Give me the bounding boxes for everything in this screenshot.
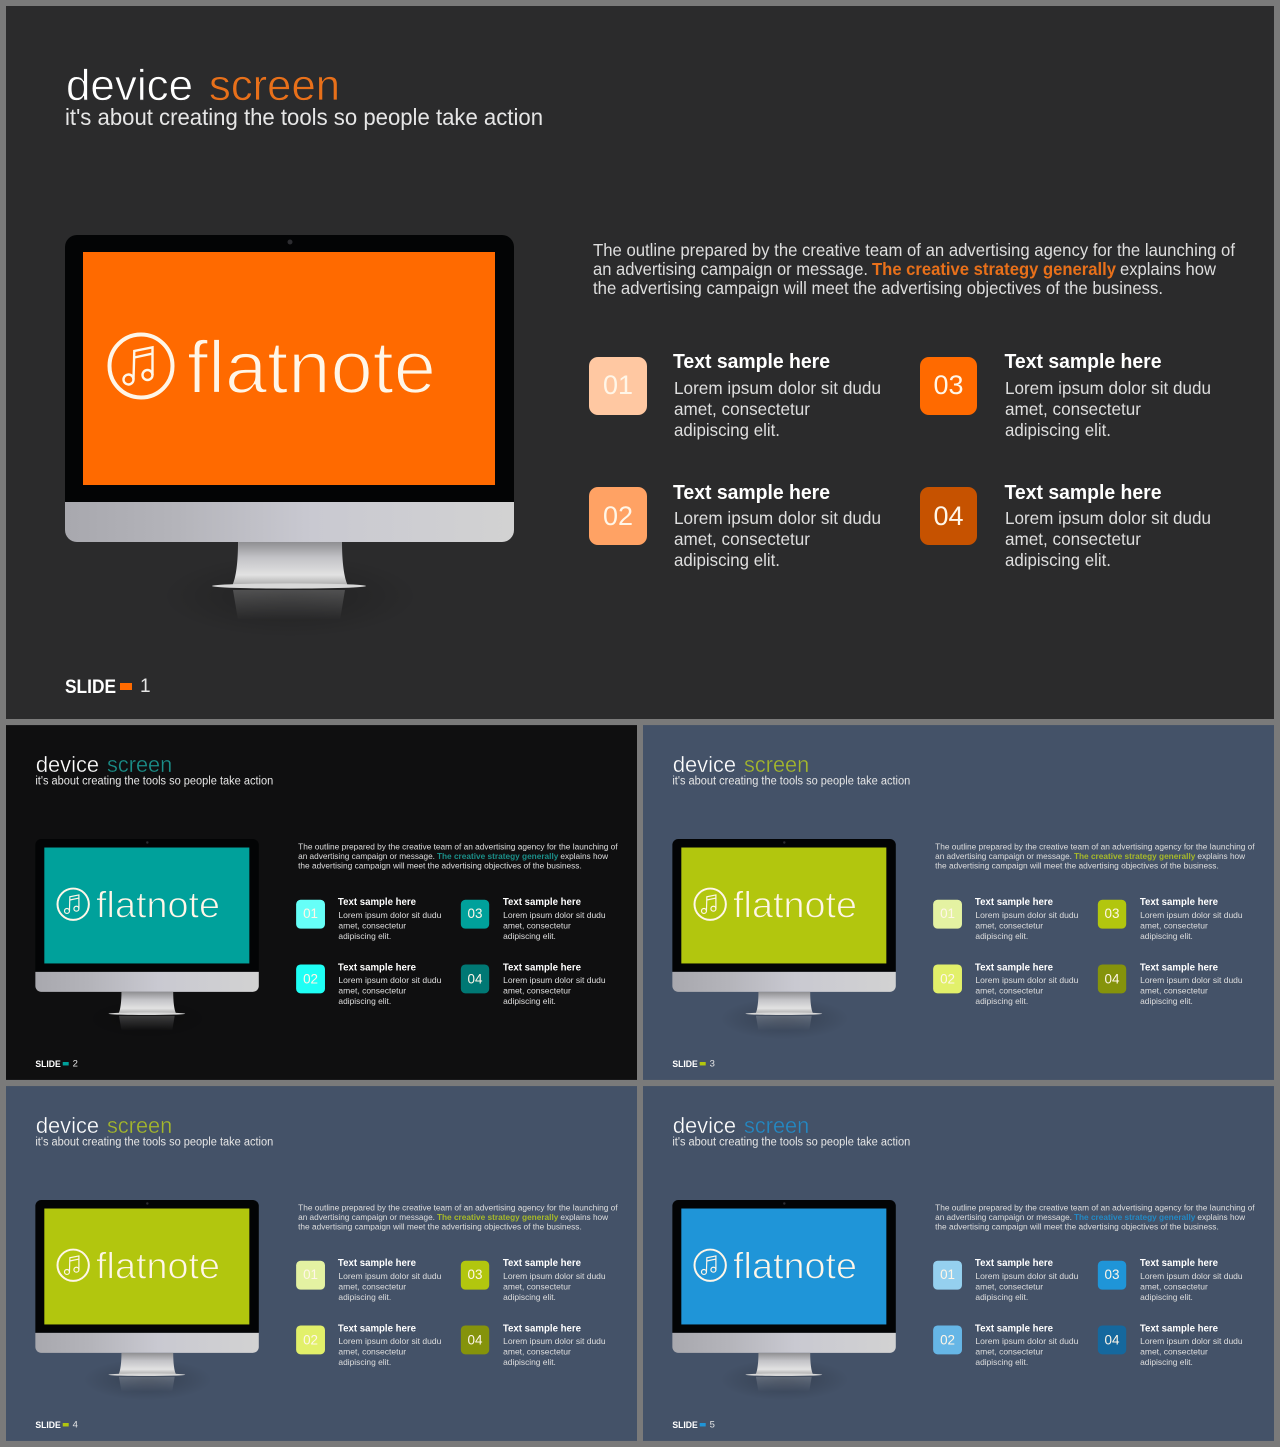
- item 01: Lorem ipsum dolor sit dudu: [338, 1271, 442, 1281]
- item 03: 03: [1105, 906, 1119, 921]
- item 02: adipiscing elit.: [338, 1357, 391, 1367]
- item 02: Text sample here: [975, 1323, 1053, 1334]
- item 04: adipiscing elit.: [1005, 550, 1111, 570]
- item 04: 04: [933, 501, 964, 531]
- item 04: 04: [1105, 1332, 1120, 1347]
- item 03: 03: [933, 370, 964, 400]
- item 01: adipiscing elit.: [338, 1292, 391, 1302]
- item 01: amet, consectetur: [674, 399, 810, 419]
- item 03: amet, consectetur: [503, 921, 571, 931]
- item 01: [933, 897, 1079, 941]
- item 04: 04: [468, 1332, 483, 1347]
- item 03: amet, consectetur: [1140, 921, 1208, 931]
- intro paragraph: the advertising campaign will meet the advertising objectives of the business.: [298, 860, 582, 870]
- title: device: [66, 61, 193, 110]
- item 04: amet, consectetur: [1140, 985, 1208, 995]
- intro paragraph: the advertising campaign will meet the advertising objectives of the business.: [593, 278, 1163, 298]
- title: [66, 61, 340, 110]
- item 04: adipiscing elit.: [1140, 1357, 1193, 1367]
- panel: slide 2 (teal, black background): [6, 725, 637, 1080]
- slide number: SLIDE: [35, 1420, 61, 1431]
- item 03: adipiscing elit.: [503, 931, 556, 941]
- slide number: [672, 1058, 715, 1070]
- intro paragraph: The outline prepared by the creative team of an advertising agency for the launching of: [593, 240, 1235, 260]
- slide number: [672, 1419, 715, 1431]
- item 01: 01: [303, 1267, 318, 1282]
- item 02: amet, consectetur: [674, 529, 810, 549]
- item 01: [589, 351, 881, 440]
- item 02: Lorem ipsum dolor sit dudu: [975, 1336, 1079, 1346]
- item 03: Lorem ipsum dolor sit dudu: [1140, 1271, 1243, 1281]
- item 02: Text sample here: [338, 1323, 416, 1334]
- item 01: adipiscing elit.: [338, 931, 391, 941]
- slide number: [35, 1058, 78, 1070]
- item 04: adipiscing elit.: [503, 1357, 556, 1367]
- intro paragraph: [298, 1203, 618, 1231]
- item 01: Lorem ipsum dolor sit dudu: [338, 910, 442, 920]
- item 04: [461, 962, 606, 1006]
- title: [673, 1113, 809, 1138]
- intro paragraph: The outline prepared by the creative team of an advertising agency for the launching of: [298, 842, 618, 852]
- intro paragraph: explains how: [1120, 259, 1216, 279]
- panel: slide 1 (orange, large): [6, 6, 1274, 719]
- item 01: Lorem ipsum dolor sit dudu: [975, 910, 1079, 920]
- slide number: 2: [73, 1058, 78, 1069]
- item 03: amet, consectetur: [1140, 1282, 1208, 1292]
- title: screen: [107, 752, 172, 777]
- intro paragraph: the advertising campaign will meet the advertising objectives of the business.: [935, 860, 1219, 870]
- title: device: [36, 752, 99, 777]
- logo: flatnote: flatnote: [96, 1246, 220, 1287]
- item 03: Lorem ipsum dolor sit dudu: [1005, 378, 1211, 398]
- title: device: [673, 752, 736, 777]
- slide number: 1: [140, 676, 151, 697]
- intro paragraph: explains how: [1197, 1212, 1246, 1222]
- item 04: amet, consectetur: [1005, 529, 1141, 549]
- item 02: amet, consectetur: [975, 1346, 1043, 1356]
- item 02: Text sample here: [338, 962, 416, 973]
- intro paragraph: The outline prepared by the creative team of an advertising agency for the launching of: [298, 1203, 618, 1213]
- monitor mockup: [672, 839, 896, 1040]
- intro paragraph: The outline prepared by the creative team of an advertising agency for the launching of: [935, 842, 1255, 852]
- item 04: amet, consectetur: [503, 1346, 571, 1356]
- title: screen: [744, 752, 809, 777]
- item 02: [589, 482, 881, 570]
- item 02: Text sample here: [975, 962, 1053, 973]
- intro paragraph: an advertising campaign or message.: [593, 259, 868, 279]
- item 03: adipiscing elit.: [1005, 420, 1111, 440]
- intro paragraph: the advertising campaign will meet the advertising objectives of the business.: [298, 1221, 582, 1231]
- item 02: adipiscing elit.: [674, 550, 780, 570]
- subtitle: it's about creating the tools so people take action: [672, 1135, 910, 1148]
- item 02: amet, consectetur: [338, 1346, 406, 1356]
- title: device: [673, 1113, 736, 1138]
- item 04: amet, consectetur: [503, 985, 571, 995]
- item 02: 02: [940, 1332, 955, 1347]
- monitor mockup: [35, 1200, 259, 1401]
- intro paragraph: The creative strategy generally: [1074, 851, 1196, 861]
- title: [36, 1113, 172, 1138]
- item 01: 01: [940, 906, 955, 921]
- item 02: [296, 1323, 442, 1367]
- item 03: Text sample here: [503, 1258, 581, 1269]
- item 03: 03: [468, 1267, 482, 1282]
- item 01: 01: [940, 1267, 955, 1282]
- item 02: 02: [940, 971, 955, 986]
- item 02: adipiscing elit.: [975, 1357, 1028, 1367]
- item 03: adipiscing elit.: [1140, 1292, 1193, 1302]
- item 03: adipiscing elit.: [503, 1292, 556, 1302]
- intro paragraph: The outline prepared by the creative team of an advertising agency for the launching of: [935, 1203, 1255, 1213]
- intro paragraph: [298, 842, 618, 870]
- item 01: Lorem ipsum dolor sit dudu: [674, 378, 881, 398]
- title: device: [36, 1113, 99, 1138]
- intro paragraph: explains how: [1197, 851, 1246, 861]
- item 02: 02: [603, 501, 633, 531]
- item 02: adipiscing elit.: [338, 996, 391, 1006]
- item 03: amet, consectetur: [503, 1282, 571, 1292]
- intro paragraph: The creative strategy generally: [437, 851, 559, 861]
- item 02: Lorem ipsum dolor sit dudu: [975, 975, 1079, 985]
- slide number: SLIDE: [65, 677, 116, 698]
- item 04: amet, consectetur: [1140, 1346, 1208, 1356]
- item 04: 04: [1105, 971, 1120, 986]
- item 04: [920, 482, 1211, 570]
- item 01: Text sample here: [338, 1258, 416, 1269]
- item 01: adipiscing elit.: [674, 420, 780, 440]
- intro paragraph: an advertising campaign or message.: [935, 1212, 1072, 1222]
- item 01: amet, consectetur: [975, 1282, 1043, 1292]
- logo: flatnote: flatnote: [733, 1246, 857, 1287]
- item 04: Lorem ipsum dolor sit dudu: [503, 975, 606, 985]
- item 01: 01: [603, 370, 633, 400]
- intro paragraph: [935, 1203, 1255, 1231]
- item 04: 04: [468, 971, 483, 986]
- intro paragraph: an advertising campaign or message.: [298, 851, 435, 861]
- item 03: 03: [468, 906, 482, 921]
- intro paragraph: an advertising campaign or message.: [298, 1212, 435, 1222]
- item 02: 02: [303, 1332, 318, 1347]
- title: [673, 752, 809, 777]
- subtitle: it's about creating the tools so people take action: [672, 774, 910, 787]
- item 02: 02: [303, 971, 318, 986]
- item 03: Text sample here: [1140, 1258, 1218, 1269]
- item 04: [461, 1323, 606, 1367]
- title: screen: [744, 1113, 809, 1138]
- intro paragraph: the advertising campaign will meet the advertising objectives of the business.: [935, 1221, 1219, 1231]
- monitor mockup: [35, 839, 259, 1040]
- item 04: Text sample here: [1140, 962, 1218, 973]
- item 01: adipiscing elit.: [975, 1292, 1028, 1302]
- item 03: [1098, 897, 1243, 941]
- item 01: amet, consectetur: [338, 1282, 406, 1292]
- item 02: Lorem ipsum dolor sit dudu: [338, 975, 442, 985]
- item 01: Text sample here: [338, 897, 416, 908]
- title: screen: [209, 61, 340, 110]
- item 03: Text sample here: [1004, 351, 1162, 373]
- monitor mockup: [65, 235, 514, 638]
- item 02: amet, consectetur: [975, 985, 1043, 995]
- item 02: [933, 962, 1079, 1006]
- item 03: Lorem ipsum dolor sit dudu: [503, 910, 606, 920]
- item 04: Lorem ipsum dolor sit dudu: [1140, 975, 1243, 985]
- panel: slide 5 (blue, slate background): [643, 1086, 1274, 1441]
- item 01: Text sample here: [673, 351, 830, 373]
- intro paragraph: The creative strategy generally: [1074, 1212, 1196, 1222]
- title: [36, 752, 172, 777]
- item 02: [933, 1323, 1079, 1367]
- logo: flatnote: flatnote: [96, 885, 220, 926]
- item 01: adipiscing elit.: [975, 931, 1028, 941]
- intro paragraph: [935, 842, 1255, 870]
- item 02: adipiscing elit.: [975, 996, 1028, 1006]
- slide number: 5: [710, 1419, 715, 1430]
- item 03: Lorem ipsum dolor sit dudu: [503, 1271, 606, 1281]
- item 01: [296, 1258, 442, 1302]
- item 04: Lorem ipsum dolor sit dudu: [1005, 508, 1211, 528]
- slide number: SLIDE: [672, 1420, 698, 1431]
- item 01: [933, 1258, 1079, 1302]
- item 02: amet, consectetur: [338, 985, 406, 995]
- subtitle: it's about creating the tools so people take action: [65, 104, 543, 130]
- item 04: [1098, 1323, 1243, 1367]
- item 03: Text sample here: [503, 897, 581, 908]
- subtitle: it's about creating the tools so people take action: [35, 1135, 273, 1148]
- intro paragraph: explains how: [560, 1212, 609, 1222]
- panel: slide 4 (lime, slate background): [6, 1086, 637, 1441]
- item 01: Text sample here: [975, 897, 1053, 908]
- item 04: Text sample here: [1140, 1323, 1218, 1334]
- item 04: Text sample here: [1004, 482, 1162, 504]
- item 01: Text sample here: [975, 1258, 1053, 1269]
- intro paragraph: The creative strategy generally: [437, 1212, 559, 1222]
- item 04: Lorem ipsum dolor sit dudu: [503, 1336, 606, 1346]
- slide number: 3: [710, 1058, 715, 1069]
- item 04: [1098, 962, 1243, 1006]
- item 03: [461, 897, 606, 941]
- slide number: [65, 676, 151, 698]
- item 03: Text sample here: [1140, 897, 1218, 908]
- subtitle: it's about creating the tools so people take action: [35, 774, 273, 787]
- slide number: SLIDE: [672, 1059, 698, 1070]
- logo: flatnote: flatnote: [733, 885, 857, 926]
- logo: flatnote: flatnote: [187, 326, 436, 409]
- item 03: [461, 1258, 606, 1302]
- item 03: [920, 351, 1211, 440]
- intro paragraph: explains how: [560, 851, 609, 861]
- item 02: Lorem ipsum dolor sit dudu: [338, 1336, 442, 1346]
- slide number: SLIDE: [35, 1059, 61, 1070]
- item 02: Text sample here: [673, 482, 830, 504]
- item 03: adipiscing elit.: [1140, 931, 1193, 941]
- intro paragraph: [593, 240, 1235, 298]
- item 01: amet, consectetur: [338, 921, 406, 931]
- item 02: Lorem ipsum dolor sit dudu: [674, 508, 881, 528]
- item 03: 03: [1105, 1267, 1119, 1282]
- item 01: [296, 897, 442, 941]
- intro paragraph: an advertising campaign or message.: [935, 851, 1072, 861]
- item 03: Lorem ipsum dolor sit dudu: [1140, 910, 1243, 920]
- item 02: [296, 962, 442, 1006]
- monitor mockup: [672, 1200, 896, 1401]
- intro paragraph: The creative strategy generally: [872, 259, 1116, 279]
- item 03: amet, consectetur: [1005, 399, 1141, 419]
- item 04: Text sample here: [503, 1323, 581, 1334]
- panel: slide 3 (lime, slate background): [643, 725, 1274, 1080]
- slide number: 4: [73, 1419, 78, 1430]
- item 04: Lorem ipsum dolor sit dudu: [1140, 1336, 1243, 1346]
- item 04: adipiscing elit.: [1140, 996, 1193, 1006]
- item 04: adipiscing elit.: [503, 996, 556, 1006]
- item 03: [1098, 1258, 1243, 1302]
- item 01: amet, consectetur: [975, 921, 1043, 931]
- item 01: Lorem ipsum dolor sit dudu: [975, 1271, 1079, 1281]
- item 01: 01: [303, 906, 318, 921]
- title: screen: [107, 1113, 172, 1138]
- item 04: Text sample here: [503, 962, 581, 973]
- slide number: [35, 1419, 78, 1431]
